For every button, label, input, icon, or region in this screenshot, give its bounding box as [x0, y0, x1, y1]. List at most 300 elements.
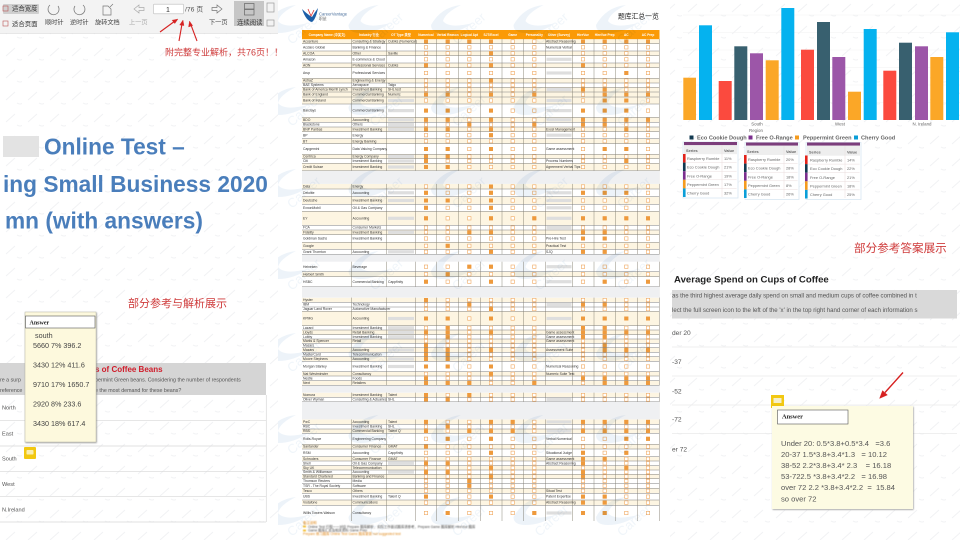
heading: online test title: Online Test –: [44, 134, 185, 160]
table rows and grid: Nat Westminster: [303, 372, 329, 376]
callout: answer note: Under 20: 0.5*3.8+0.5*3.4 =3.6: [781, 439, 890, 448]
table rows and grid: Situational Judge: [546, 451, 572, 455]
answer option rows: -37: [672, 359, 682, 366]
logo: [302, 8, 348, 22]
table header: AC Prep: [642, 33, 654, 37]
toolbar: /76 页: [185, 6, 203, 14]
chart legend: Eco Cookie Dough: [697, 136, 747, 142]
question table: coffee beans: N.Ireland: [2, 508, 25, 514]
table rows and grid: Rolls-Royce: [303, 437, 321, 441]
table rows and grid: Communications: [352, 501, 378, 505]
data table: west: 18%: [786, 174, 794, 179]
table rows and grid: Tesco: [303, 489, 312, 493]
panel: average spend on coffee: [672, 241, 957, 509]
table rows and grid: Hyster: [303, 298, 314, 302]
table rows and grid: Others: [352, 123, 363, 127]
callout: answer note: [25, 312, 96, 442]
table rows and grid: Saville: [388, 51, 398, 55]
table rows and grid: Investment Banking: [352, 425, 382, 429]
table rows and grid: Smith & Williamson: [303, 470, 332, 474]
logo: CareerVantage: [319, 12, 348, 16]
table rows and grid: Pre-Hire Test: [546, 237, 566, 241]
table rows and grid: Telecommunication: [352, 466, 382, 470]
table rows and grid: Cubiks (Numerical): [388, 40, 417, 44]
table rows and grid: Consumer Markets: [352, 226, 381, 230]
table rows and grid: Data: [303, 185, 310, 189]
table rows and grid: Herbert Smith: [303, 272, 324, 276]
toolbar: 旋转文档: [95, 18, 120, 26]
table rows and grid: Mazars: [303, 344, 314, 348]
data table: n. ireland: 14%: [847, 158, 855, 162]
data table: first region: Eco Cookie Dough: [687, 165, 719, 170]
table rows and grid: Consultancy: [352, 511, 371, 515]
data table: west: Free O-Range: [748, 174, 773, 179]
panel: PDF viewer screenshot: [0, 0, 283, 522]
table rows and grid: Oil & Gas Company: [352, 461, 383, 465]
table rows and grid: Technology: [352, 303, 370, 307]
callout: answer note: 53-722.5 *3.8+3.4*2.2 = 16.98: [781, 472, 887, 481]
section label: partial reference: 部分参考与解析展示: [128, 296, 227, 310]
table rows and grid: Centrica: [303, 155, 316, 159]
table rows and grid: Patent Expertise: [546, 495, 571, 499]
table rows and grid: Oliver Wyman: [303, 398, 324, 402]
callout: answer note: Answer: [30, 320, 50, 326]
table rows and grid: Talent: [388, 420, 397, 424]
table rows and grid: Abstract Reasoning: [546, 461, 576, 465]
table header: HireVue: [577, 33, 589, 37]
callout: answer note: 9710 17% 1650.7: [33, 380, 89, 389]
table rows and grid: Investment Banking: [352, 365, 382, 369]
table rows and grid: Accenture: [303, 40, 318, 44]
table footnote legend: Prepare 练习题库 Online Test Game 题库更新 not suggested test: [303, 531, 401, 536]
data table: west: 28%: [786, 166, 794, 171]
data table: n. ireland: Value: [847, 150, 858, 154]
table header: AC: [624, 33, 629, 37]
table rows and grid: Cappfinity: [388, 451, 403, 455]
callout: answer note: 3430 18% 617.4: [33, 419, 85, 428]
table rows and grid: GMAT: [388, 457, 398, 461]
table header: Game: [508, 33, 517, 37]
toolbar: 适合宽度: [12, 3, 38, 12]
data table: west: 8%: [786, 183, 792, 188]
table rows and grid: Investment Banking: [352, 393, 382, 397]
table rows and grid: Morgan Stanley: [303, 365, 327, 369]
table rows and grid: Numerical Verbal: [546, 45, 572, 49]
table rows and grid: Deutsche: [303, 199, 317, 203]
chart legend: Peppermint Green: [803, 136, 852, 142]
question table: coffee beans: North: [2, 406, 16, 412]
data table: west: 26%: [786, 192, 794, 196]
data table: first region: 17%: [724, 182, 732, 187]
table rows and grid: Barclays: [303, 109, 316, 113]
toolbar: 适合页面: [12, 19, 38, 28]
data table: n. ireland: 22%: [847, 166, 855, 171]
table rows and grid: Engineering & Energy: [352, 79, 386, 83]
table rows and grid: Abstract Reasoning: [546, 40, 576, 44]
table rows and grid: Moore Stephens: [303, 357, 328, 361]
table title: 题库汇总一览: [618, 12, 659, 20]
bar chart: South: [751, 122, 763, 126]
data table: n. ireland: Eco Cookie Dough: [810, 166, 842, 171]
table rows and grid: Game assessment: [546, 457, 574, 461]
data table: n. ireland: Free O-Range: [810, 175, 835, 180]
table rows and grid: Grant Thornton: [303, 250, 326, 254]
data table: first region: 32%: [724, 190, 732, 196]
table rows and grid: Jaguar Land Rover: [303, 307, 333, 311]
question text band: lect the full screen icon to the left of the 'x' in the top right hand corner of each information s: [672, 307, 918, 314]
table rows and grid: Aerospace: [352, 83, 369, 87]
table header: SJT/Excel: [483, 33, 499, 37]
table rows and grid: Game assessment: [546, 147, 574, 151]
table header: Numerical: [418, 33, 434, 37]
annotation: 76 pages: 附完整专业解析，共76页！！: [165, 46, 283, 58]
table rows and grid: Thomson Reuters: [303, 479, 330, 483]
table rows and grid: IBM: [303, 303, 309, 307]
table rows and grid: SHL: [388, 398, 395, 402]
table rows and grid: Acclaro Global: [303, 45, 325, 49]
question table: coffee beans: South: [2, 456, 17, 462]
table rows and grid: Others: [352, 489, 363, 493]
answer option rows: -52: [672, 388, 682, 396]
bar chart: Region: [749, 128, 764, 133]
table header: Company Name (中英文): [309, 32, 345, 37]
table header: HireVue Prep: [595, 33, 615, 37]
table header: Personality: [526, 33, 543, 37]
table rows and grid: Other: [352, 51, 362, 55]
data table: n. ireland: 18%: [847, 183, 855, 188]
table rows and grid: E-commerce & Cloud: [352, 57, 385, 61]
table rows and grid: Energy: [352, 185, 364, 189]
table rows and grid: HSBC: [303, 280, 313, 284]
table rows and grid: Credit Suisse: [303, 165, 323, 169]
panel: question bank summary table: [302, 8, 660, 536]
table rows and grid: Commercial Banking: [352, 109, 384, 113]
icon: comment marker: [771, 395, 784, 408]
table footnote legend: 备注说明: [303, 520, 317, 525]
table rows and grid: Investment Banking: [352, 199, 382, 203]
table rows and grid: Santander: [303, 445, 320, 449]
chart legend: Free O-Range: [756, 136, 793, 142]
table rows and grid: UBS: [303, 495, 311, 499]
table rows and grid: Software: [352, 484, 366, 488]
table rows and grid: Data Valuing Company: [352, 147, 387, 151]
table rows and grid: Game assessment: [546, 339, 574, 343]
table rows and grid: Commercial Banking: [352, 93, 384, 97]
table rows and grid: Energy: [352, 133, 364, 137]
data table: west: Value: [786, 149, 797, 154]
question table: coffee beans: re a surp: [0, 378, 21, 384]
callout: answer note: over 72 2.2 *3.8+3.4*2.2 = 15.84: [781, 483, 895, 492]
callout: answer note: so over 72: [781, 494, 816, 504]
table rows and grid: Investment Banking: [352, 335, 382, 339]
table rows and grid: Game assessment: [546, 330, 574, 334]
data table: first region: 11%: [724, 156, 732, 161]
table rows and grid: AON: [303, 63, 311, 67]
table rows and grid: Lloyds: [303, 330, 313, 334]
table rows and grid: Sky UK: [303, 466, 315, 470]
icon: comment marker: [24, 447, 36, 459]
question table: coffee beans: East: [2, 432, 14, 438]
question text band: as the third highest average daily spend on small and medium cups of coffee combined in t: [672, 292, 917, 300]
table rows and grid: Vodafone: [303, 501, 317, 505]
arrow pointing to answer: [880, 372, 903, 398]
callout: answer note: 2920 8% 233.6: [33, 400, 81, 408]
table rows and grid: Commercial Banking: [352, 280, 384, 284]
bar chart: West: [835, 122, 846, 126]
data table: first region: Free O-Range: [687, 173, 712, 178]
question table: coffee beans: s of Coffee Beans: [95, 365, 163, 374]
table rows and grid: Situat Test: [546, 489, 562, 493]
table rows and grid: Bank of America Merrill Lynch: [303, 88, 348, 92]
answer option rows: er 72: [672, 446, 687, 454]
bar chart: N. Ireland: [912, 122, 932, 126]
data table: first region: 21%: [724, 165, 732, 170]
data table: n. ireland: Peppermint Green: [810, 183, 842, 188]
table rows and grid: EY: [303, 216, 308, 220]
data table: west: Raspberry Rumble: [748, 157, 780, 162]
table rows and grid: Automotive Manufacturer: [352, 307, 391, 311]
table rows and grid: Excel Management: [546, 127, 575, 131]
data table: n. ireland: Cherry Good: [810, 192, 832, 197]
table rows and grid: Marks & Spencer: [303, 339, 330, 343]
question text band: [672, 290, 957, 318]
table rows and grid: Talent: [388, 393, 397, 397]
table rows and grid: Goldman Sachs: [303, 237, 327, 241]
data table: n. ireland: Series: [809, 150, 821, 154]
table header: OT Type 类型: [391, 32, 412, 37]
table rows and grid: Beverage: [352, 265, 367, 269]
table rows and grid: SHL test: [388, 88, 401, 92]
table rows and grid: Bank of Ireland: [303, 99, 326, 103]
table rows and grid: Accounting: [352, 250, 369, 254]
table rows and grid: Professional Services: [352, 63, 385, 67]
data table: first region: Value: [724, 148, 735, 153]
table rows and grid: MasterCard: [303, 353, 321, 357]
table rows and grid: Accounting: [352, 191, 369, 195]
table rows and grid: Assessment Suite: [546, 348, 573, 352]
table header: [302, 30, 660, 39]
table rows and grid: Process Numbers: [546, 159, 573, 163]
table rows and grid: GMAT: [388, 445, 398, 449]
table rows and grid: Accounting: [352, 451, 369, 455]
data table: first region: Raspberry Rumble: [687, 156, 719, 161]
table rows and grid: Consulting & Strategy: [352, 40, 386, 44]
question table: coffee beans: West: [2, 482, 15, 488]
table rows and grid: Schroders: [303, 457, 319, 461]
table rows and grid: RSM: [303, 451, 311, 455]
table rows and grid: Arup: [303, 71, 310, 75]
table rows and grid: Nestle: [303, 376, 313, 380]
heading: online test title: mn (with answers): [5, 208, 203, 234]
table rows and grid: Consultancy: [352, 372, 371, 376]
table rows and grid: Oil & Gas Company: [352, 206, 383, 210]
data table: n. ireland: 21%: [847, 175, 855, 180]
callout: answer note: Answer: [782, 414, 803, 420]
table rows and grid: Talent Q: [388, 429, 401, 433]
toolbar: [0, 0, 278, 34]
callout: answer note: 38-52 2.2*3.8+3.4* 2.3 = 16.18: [781, 461, 891, 470]
table rows and grid: Media: [352, 479, 362, 483]
table rows and grid: ExxonMobil: [303, 206, 321, 210]
table rows and grid: Consulting & Actuaries: [352, 398, 387, 402]
table rows and grid: FCA: [303, 226, 311, 230]
table rows and grid: Investment Banking: [352, 495, 382, 499]
table rows and grid: Accounting: [352, 420, 369, 424]
table rows and grid: [302, 39, 660, 521]
table rows and grid: KPMG: [303, 317, 313, 321]
table rows and grid: RBC: [303, 425, 311, 429]
data table: west: Series: [747, 149, 759, 154]
table rows and grid: Talent Q: [388, 495, 401, 499]
table rows and grid: Accounting: [352, 470, 369, 474]
panel: bar chart and data tables: [683, 8, 960, 200]
data table: west: Eco Cookie Dough: [748, 166, 780, 171]
heading: online test title: [3, 134, 268, 234]
toolbar: 下一页: [209, 20, 228, 26]
table rows and grid: Accounting: [352, 348, 369, 352]
table header: Verbal Reason: [437, 33, 459, 37]
table rows and grid: Retail: [352, 339, 361, 343]
table rows and grid: Talgo: [388, 83, 396, 87]
table rows and grid: Willis Towers Watson: [303, 511, 335, 515]
annotation arrows to page count: [160, 19, 197, 41]
callout: answer note: 20-37 1.5*3.8+3.4*1.3 = 10.12: [781, 450, 887, 459]
table rows and grid: Fidelity: [303, 230, 314, 234]
answer option rows: -72: [672, 416, 682, 424]
table rows and grid: Investment Banking: [352, 326, 382, 330]
question table: coffee beans: [0, 363, 266, 522]
table footnote legend: Game 题库汇总及相关资料 Game Prep: [308, 528, 367, 532]
table rows and grid: Standard Chartered: [303, 475, 333, 479]
table rows and grid: Abstract Reasoning: [546, 501, 576, 505]
table rows and grid: Verbal Numerical: [546, 437, 572, 441]
logo: 职瓮: [319, 16, 327, 21]
table rows and grid: Amazon: [303, 57, 316, 61]
data table: first region: Cherry Good: [687, 190, 709, 196]
callout: answer note: [772, 406, 913, 509]
data table: first region: Peppermint Green: [687, 182, 719, 187]
table rows and grid: Heineken: [303, 265, 317, 269]
table rows and grid: Banking & Finance: [352, 45, 381, 49]
table rows and grid: Consumer Finance: [352, 457, 381, 461]
data table: n. ireland: Raspberry Rumble: [810, 158, 842, 162]
table rows and grid: Energy Company: [352, 155, 379, 159]
table header: Logical Apt: [461, 33, 479, 37]
table rows and grid: Lobby: [303, 335, 313, 339]
toolbar: 逆时针: [70, 18, 89, 26]
table rows and grid: Accounting: [352, 317, 369, 321]
callout: answer note: 3430 12% 411.6: [33, 360, 85, 370]
table header: Other (Survey): [548, 33, 570, 37]
table footnote legend: Online Test 行程一一对应 Prepare 题库解析，实际工作面试题库请参考，Prepare Game 题库解析 HireVue 题库: [308, 524, 476, 529]
table rows and grid: AstraZ: [303, 79, 313, 83]
table rows and grid: Numeric: [388, 93, 401, 97]
section label: partial answers: 部分参考答案展示: [854, 241, 947, 255]
table rows and grid: Nomura: [303, 393, 315, 397]
table rows and grid: Investment Banking: [352, 230, 382, 234]
table rows and grid: Telecommunication: [352, 353, 382, 357]
table rows and grid: Deloitte: [303, 191, 315, 195]
callout: answer note: 5660 7% 396.2: [33, 341, 81, 350]
table rows and grid: Engineering Company: [352, 437, 386, 441]
data table: west: Peppermint Green: [748, 183, 780, 188]
data table: n. ireland: 25%: [847, 192, 855, 197]
table rows and grid: Accounting: [352, 357, 369, 361]
table rows and grid: Next: [303, 381, 310, 385]
table rows and grid: Retail Banking: [352, 330, 374, 334]
data table: west: Cherry Good: [748, 192, 770, 196]
table rows and grid: SHL: [388, 425, 395, 429]
table rows and grid: Google: [303, 244, 314, 248]
data table: west: 20%: [786, 157, 794, 162]
table rows and grid: BT: [303, 139, 307, 143]
heading: online test title: ing Small Business 2020: [3, 171, 268, 197]
table rows and grid: Commercial Banking: [352, 429, 384, 433]
table rows and grid: Commercial Banking: [352, 99, 384, 103]
table rows and grid: Consumer Finance: [352, 445, 381, 449]
table rows and grid: Banking and Finance: [352, 475, 384, 479]
table rows and grid: ALCOA: [303, 51, 315, 55]
toolbar: 1: [166, 7, 170, 14]
question table: coffee beans: reference: [0, 388, 22, 394]
toolbar: 顺时针: [45, 18, 64, 26]
background watermark: centre overlay: [278, 0, 670, 540]
table rows and grid: Numerical Reasoning: [546, 365, 579, 369]
toolbar: 上一页: [129, 18, 148, 26]
table rows and grid: BP: [303, 133, 308, 137]
table rows and grid: Energy Banking: [352, 139, 377, 143]
background watermark: right panel: [670, 0, 960, 540]
chart legend: [690, 136, 896, 142]
answer option rows: der 20: [672, 330, 691, 337]
table rows and grid: Numeric Suite Test: [546, 372, 574, 376]
table rows and grid: Investment Banking: [352, 237, 382, 241]
question table: coffee beans: permint Green beans. Considering the number of respondents: [95, 378, 241, 384]
table rows and grid: Investment Banking: [352, 165, 382, 169]
table rows and grid: BNP Paribas: [303, 127, 323, 131]
question title: Average Spend on Cups of Coffee: [674, 274, 829, 286]
table rows and grid: Professional Services: [352, 71, 385, 75]
data table: west: [744, 142, 799, 200]
table rows and grid: PwC: [303, 420, 311, 424]
chart legend: Cherry Good: [861, 136, 896, 142]
table rows and grid: Cappfinity: [388, 280, 403, 284]
table rows and grid: Accounting: [352, 118, 369, 122]
table rows and grid: TSR - The Royal Society: [303, 484, 341, 488]
table rows and grid: Investment Banking: [352, 127, 382, 131]
table rows and grid: Retailers: [352, 381, 366, 385]
table rows and grid: Investment Banking: [352, 159, 382, 163]
table rows and grid: Accounting: [352, 216, 369, 220]
table rows and grid: SJQ: [546, 250, 553, 254]
table rows and grid: Bank of England: [303, 93, 328, 97]
table rows and grid: Blackstone: [303, 123, 320, 127]
table header: Industry 行业: [359, 32, 380, 37]
table rows and grid: Lazard: [303, 326, 313, 330]
data table: n. ireland: [805, 142, 861, 200]
data table: first region: 19%: [724, 173, 732, 178]
table rows and grid: Foods: [352, 376, 362, 380]
data table: first region: Series: [686, 148, 698, 153]
bar chart: [683, 8, 960, 133]
table rows and grid: Capgemini: [303, 147, 319, 151]
table rows and grid: Agreement Verbal Tips: [546, 165, 581, 169]
table rows and grid: Practical Test: [546, 244, 566, 248]
table rows and grid: RBS: [303, 429, 311, 433]
toolbar: 连续阅读: [237, 18, 263, 26]
table rows and grid: BDO: [303, 118, 311, 122]
question table: coffee beans: e the most demand for these beans?: [95, 388, 181, 394]
